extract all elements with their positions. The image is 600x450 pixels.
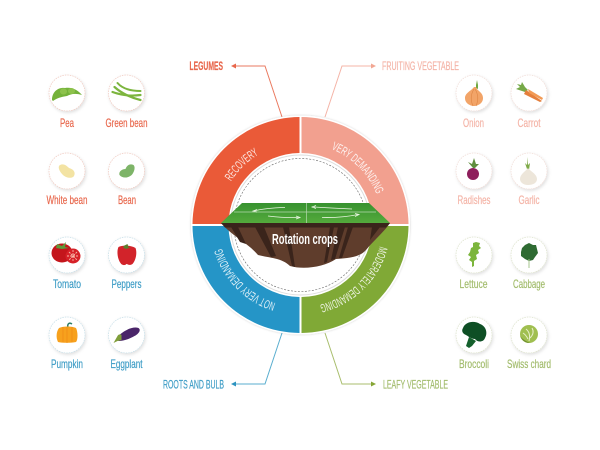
- item: peppers: [108, 237, 144, 291]
- rotation arrows: [253, 206, 359, 219]
- category: roots and bulb leader and heading: ROOTS AND BULB: [163, 378, 224, 392]
- item: bean: [108, 153, 144, 207]
- category: legumes leader and heading: LEGUMES: [190, 59, 223, 73]
- icon: garlic: [520, 157, 537, 185]
- label: garlic: Garlic: [518, 193, 540, 207]
- icon: onion: [465, 80, 483, 106]
- label: carrot: Carrot: [518, 116, 541, 130]
- floating island: [221, 203, 390, 268]
- label: green bean: Green bean: [106, 116, 148, 130]
- item: eggplant: [108, 317, 144, 371]
- label: swiss chard: Swiss chard: [507, 357, 551, 371]
- label: tomato: Tomato: [53, 277, 81, 291]
- item: broccoli: [456, 317, 492, 371]
- ring segment: recovery: [192, 117, 300, 224]
- item: swiss chard: [507, 317, 551, 371]
- item: cabbage: [511, 237, 547, 291]
- label: onion: Onion: [463, 116, 484, 130]
- item: pea: [49, 75, 85, 130]
- category: fruiting vegetable leader and heading: FRUITING VEGETABLE: [382, 59, 459, 73]
- category: roots and bulb leader and heading: [163, 333, 282, 392]
- grass top: [221, 203, 390, 223]
- label: radishes: Radishes: [458, 193, 490, 207]
- icon: eggplant: [114, 328, 140, 343]
- icon: lettuce: [468, 242, 481, 267]
- label: broccoli: Broccoli: [459, 357, 489, 371]
- category: leafy vegetable leader and heading: LEAFY VEGETABLE: [383, 378, 448, 392]
- ring segment: not very demanding: [192, 226, 300, 333]
- icon: white bean: [59, 164, 75, 178]
- ring label: very demanding: VERY DEMANDING: [333, 142, 384, 194]
- icon: tomato: [52, 242, 80, 264]
- category: leafy vegetable leader and heading: [325, 333, 448, 392]
- category: fruiting vegetable leader and heading: [325, 59, 459, 117]
- rotation ring diagram: [190, 114, 411, 336]
- icon: pea pod: [52, 88, 82, 101]
- icon: carrot: [516, 82, 543, 102]
- field dividers: [234, 203, 376, 223]
- item: radishes: [456, 153, 492, 207]
- ring label: recovery: RECOVERY: [224, 148, 257, 181]
- icon: green beans: [112, 83, 140, 100]
- title: rotation crops: Rotation crops: [272, 231, 338, 248]
- item: tomato: [49, 237, 85, 291]
- ring label: not very demanding: NOT VERY DEMANDING: [214, 249, 276, 311]
- item: carrot: [511, 75, 547, 130]
- inner circle: [230, 155, 370, 295]
- icon: bean: [119, 164, 135, 178]
- label: bean: Bean: [118, 193, 136, 207]
- soil dark rim and cracks: [221, 223, 390, 267]
- ring label: moderately demanding: MODERATELY DEMANDING: [320, 246, 388, 312]
- label: white bean: White bean: [46, 193, 88, 207]
- item: onion: [456, 75, 492, 130]
- ring segment: moderately demanding: [302, 226, 408, 333]
- icon: pepper: [117, 244, 136, 265]
- icon: cabbage leaf: [521, 243, 538, 268]
- ring segment: very demanding: [302, 117, 408, 224]
- category: legumes leader and heading: [190, 59, 282, 117]
- label: peppers: Peppers: [112, 277, 142, 291]
- icon: swiss chard: [520, 325, 538, 343]
- label: pumpkin: Pumpkin: [51, 357, 83, 371]
- icon: radish: [467, 158, 479, 180]
- item: lettuce: [456, 237, 492, 291]
- item: garlic: [511, 153, 547, 207]
- soil underside: [221, 223, 390, 268]
- icon: pumpkin: [57, 323, 78, 343]
- label: cabbage: Cabbage: [513, 277, 545, 291]
- label: pea: Pea: [60, 116, 74, 130]
- icon: broccoli: [462, 322, 486, 348]
- item: green bean: [106, 75, 148, 130]
- item: white bean: [46, 153, 88, 207]
- label: lettuce: Lettuce: [460, 277, 488, 291]
- dashed circle: [234, 158, 367, 292]
- item: pumpkin: [49, 317, 85, 371]
- label: eggplant: Eggplant: [110, 357, 143, 371]
